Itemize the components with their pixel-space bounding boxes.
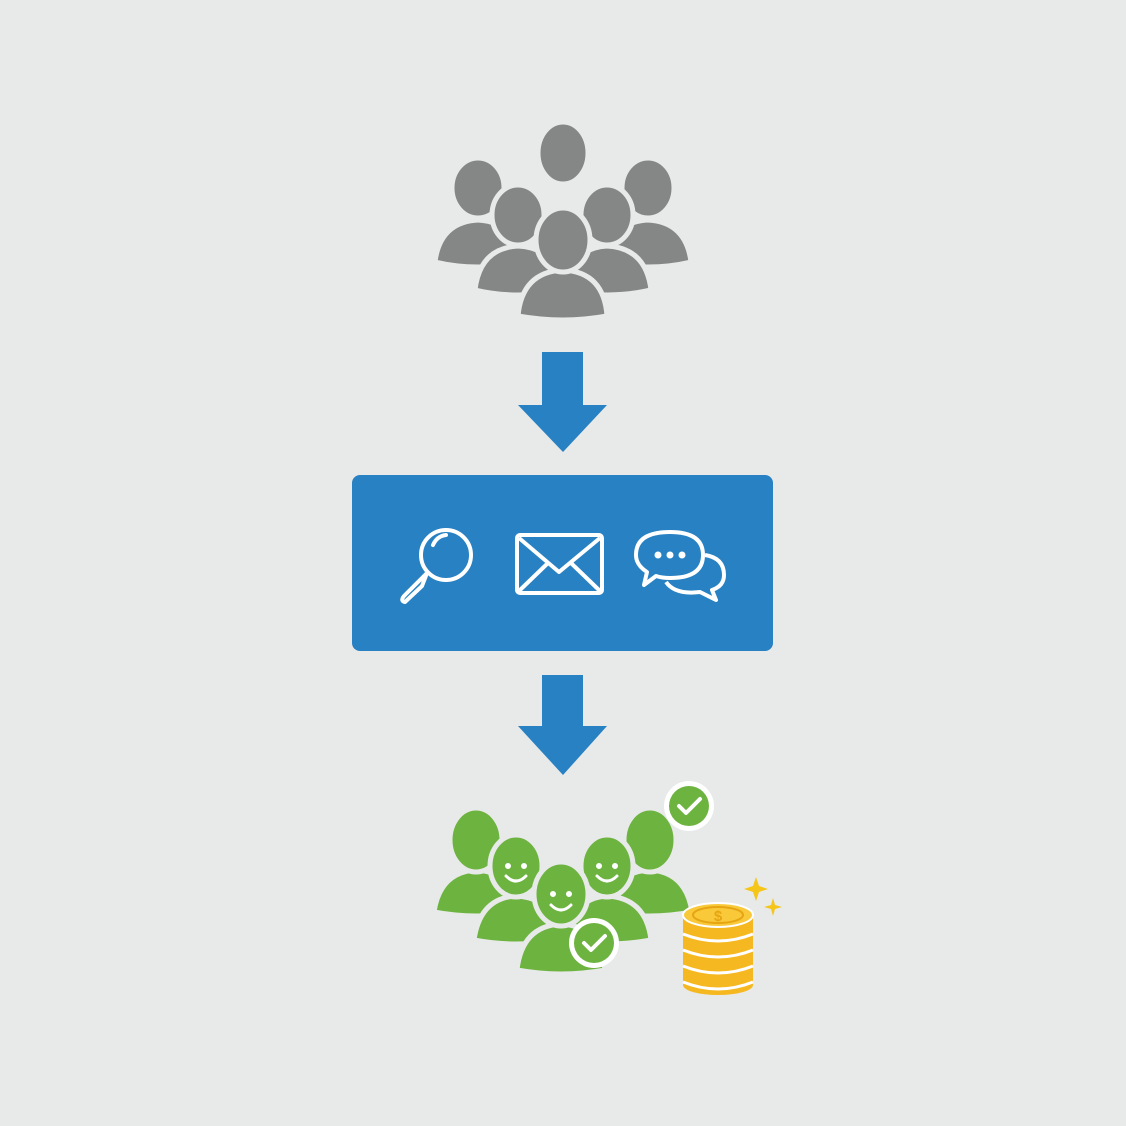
arrow: down 2 — [518, 675, 607, 775]
icon: gray crowd — [435, 122, 691, 320]
faces — [506, 864, 617, 910]
icon: green happy crowd — [434, 808, 692, 974]
arrow: down 1 — [518, 352, 607, 452]
badge: check bottom — [569, 918, 619, 968]
icon: coin stack — [683, 903, 753, 995]
icon: coin stack: $ — [714, 908, 723, 925]
icon: sparkles — [744, 877, 782, 916]
icon: magnifier — [402, 530, 471, 602]
panel: channels — [352, 475, 773, 651]
icon: envelope — [517, 535, 602, 593]
icon: chat bubbles — [636, 532, 724, 600]
badge: check top — [664, 781, 714, 831]
